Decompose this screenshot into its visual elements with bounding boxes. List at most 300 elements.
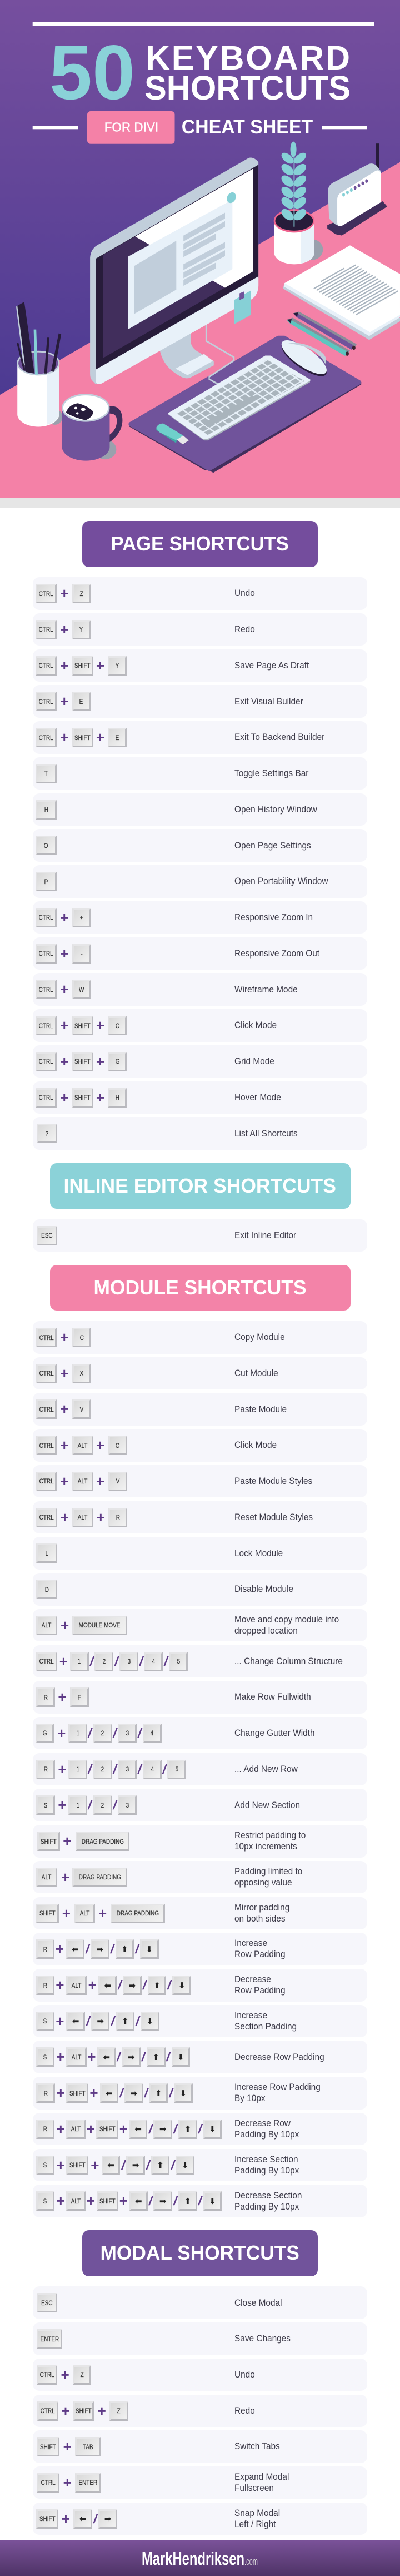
keys: shift drag padding <box>37 1832 129 1851</box>
keys: ctrl x: + <box>60 1365 68 1382</box>
keys: s shift arrows: ⬅ <box>107 2160 114 2170</box>
row: increase section padding <box>33 2005 367 2037</box>
panel: inline editor shortcuts <box>33 1163 367 1252</box>
keys: s alt arrows: / <box>117 2049 121 2064</box>
description: Exit To Backend Builder <box>234 732 324 742</box>
description: Open Page Settings <box>234 840 311 851</box>
row: close modal <box>33 2286 367 2319</box>
keys: s arrows: + <box>56 2013 64 2029</box>
keys: shift drag padding: SHIFT <box>41 1838 57 1845</box>
keys: ctrl w: CTRL <box>39 986 53 994</box>
keys: shift alt drag padding <box>33 1904 165 1923</box>
keys: s alt arrows: S <box>43 2053 47 2061</box>
footer <box>0 2540 400 2576</box>
keys: ctrl z: Z <box>79 589 83 597</box>
description: Increase Row Padding <box>234 2082 320 2092</box>
keys: r alt shift arrows: R <box>43 2125 47 2133</box>
description: Responsive Zoom In <box>234 912 313 922</box>
keys: s alt shift arrows: ALT <box>71 2197 81 2205</box>
row: undo <box>33 2359 367 2391</box>
keys: g 1 2 3 4: / <box>88 1726 92 1740</box>
description: Row Padding <box>234 1949 285 1959</box>
keys: ctrl shift z: Z <box>117 2407 121 2415</box>
row: increase section padding by 10px <box>33 2149 367 2181</box>
description <box>234 1614 339 1636</box>
row: responsive zoom out <box>33 937 367 970</box>
row: redo <box>33 2394 367 2427</box>
keys: s arrows: / <box>111 2014 114 2028</box>
keys: s alt shift arrows: / <box>198 2193 202 2208</box>
keys: ctrl shift h: H <box>116 1094 119 1101</box>
icon: monitor <box>90 158 258 384</box>
description: Save Page As Draft <box>234 660 309 671</box>
keys: s 1 2 3: + <box>58 1796 67 1813</box>
keys: r alt arrows: ALT <box>71 1982 81 1989</box>
keys: ctrl shift g: + <box>60 1053 68 1070</box>
row: toggle settings bar <box>33 757 367 790</box>
row: decrease section padding by 10px <box>33 2185 367 2217</box>
keys: shift arrows: ➡ <box>104 2514 111 2524</box>
keys: ctrl shift h: + <box>60 1089 68 1105</box>
keys: ctrl shift h <box>36 1088 127 1108</box>
description: Switch Tabs <box>234 2441 279 2451</box>
keys: ctrl 1 2 3 4 5: 4 <box>152 1657 155 1665</box>
row: redo <box>33 613 367 646</box>
keys: r arrows: ⬇ <box>146 1944 153 1954</box>
keys: r 1 2 3 4 5: / <box>88 1762 92 1776</box>
keys: esc: ESC <box>41 1232 53 1239</box>
keys: s alt shift arrows: S <box>43 2197 47 2205</box>
keys: ctrl y <box>36 620 91 639</box>
keys: ctrl enter <box>33 2473 101 2493</box>
keys: alt drag padding <box>36 1868 127 1887</box>
keys: ctrl shift c: + <box>60 1017 68 1034</box>
keys: shift arrows: + <box>62 2510 70 2527</box>
icon: coffee mug <box>62 394 122 461</box>
heading: modal shortcuts <box>82 2230 318 2276</box>
keys: ctrl alt r: + <box>61 1509 69 1526</box>
keys: r 1 2 3 4 5: R <box>43 1765 48 1773</box>
keys: d: D <box>44 1586 49 1594</box>
keys: s arrows: / <box>86 2014 90 2028</box>
description: Padding By 10px <box>234 2201 299 2212</box>
keys: ctrl shift c: SHIFT <box>74 1022 91 1030</box>
row: increase row padding by 10px <box>33 2077 367 2110</box>
keys: s alt shift arrows: ⬆ <box>184 2196 191 2206</box>
keys: ctrl shift y: Y <box>116 662 119 669</box>
keys: ctrl alt v: + <box>96 1473 104 1490</box>
description: Undo <box>234 2369 254 2380</box>
keys: r alt arrows: ⬅ <box>104 1981 111 1991</box>
keys: r alt arrows: R <box>43 1982 47 1989</box>
title KEYBOARD: KEYBOARD <box>146 39 350 77</box>
keys: ctrl alt r: R <box>116 1513 120 1521</box>
description: Padding By 10px <box>234 2129 299 2140</box>
description: Save Changes <box>234 2333 290 2344</box>
row: copy module <box>33 1321 367 1353</box>
description: Disable Module <box>234 1584 293 1594</box>
keys: r f: R <box>43 1694 48 1701</box>
keys: alt drag padding: + <box>61 1869 69 1885</box>
description: Move and copy module into <box>234 1614 339 1625</box>
keys: s alt arrows: ⬆ <box>152 2052 159 2062</box>
keys: ctrl v: V <box>80 1406 83 1413</box>
description: Open History Window <box>234 804 317 815</box>
keys: s shift arrows: + <box>57 2157 65 2173</box>
footer brand text: .com <box>244 2556 258 2567</box>
keys: r alt shift arrows: + <box>119 2121 128 2137</box>
description <box>234 1933 285 1965</box>
keys: r alt shift arrows: ⬆ <box>184 2124 191 2134</box>
badge: for divi <box>87 111 174 144</box>
keys: r arrows: / <box>135 1942 139 1956</box>
description: Decrease Row Padding <box>234 2052 324 2062</box>
row: responsive zoom in <box>33 901 367 934</box>
keys: r alt shift arrows: / <box>198 2122 202 2136</box>
row: open history window <box>33 793 367 826</box>
keys: ctrl w: + <box>60 981 68 997</box>
description: 10px increments <box>234 1841 297 1852</box>
keys: shift tab <box>33 2437 101 2456</box>
keys: r 1 2 3 4 5: 2 <box>101 1765 104 1773</box>
keys: ctrl alt v: V <box>116 1477 119 1485</box>
keys: ctrl shift e: + <box>96 729 104 746</box>
keys: ctrl 1 2 3 4 5: / <box>114 1654 118 1668</box>
keys: ctrl shift h: + <box>96 1089 104 1105</box>
keys: ctrl alt c: CTRL <box>39 1442 54 1450</box>
keys: ctrl shift g: + <box>96 1053 104 1070</box>
icon: paper stack <box>283 245 400 340</box>
keys: ctrl shift y <box>36 656 127 676</box>
description: Expand Modal <box>234 2471 289 2482</box>
row: paste module styles <box>33 1465 367 1497</box>
keys: shift drag padding: + <box>63 1833 71 1849</box>
grey divider band <box>0 498 400 508</box>
keys: alt drag padding: ALT <box>42 1873 52 1881</box>
keys: l: L <box>45 1550 48 1557</box>
description: Paste Module Styles <box>234 1476 312 1486</box>
row: snap modal left right <box>33 2503 367 2535</box>
description <box>234 2185 302 2217</box>
keys: ctrl shift e: + <box>60 729 68 746</box>
keys: r alt arrows: / <box>143 1978 146 1992</box>
keys: r alt shift arrows: + <box>87 2121 95 2137</box>
keys: ctrl v <box>36 1399 91 1419</box>
keys: ctrl z: Z <box>81 2371 84 2379</box>
keys: s arrows: ⬆ <box>122 2016 129 2026</box>
keys: r alt shift arrows: ⬇ <box>209 2124 216 2134</box>
keys: r arrows: R <box>43 1945 47 1953</box>
keys: s shift arrows: ⬇ <box>182 2160 188 2170</box>
keys: r shift arrows: ⬆ <box>155 2088 162 2098</box>
keys: r shift arrows: / <box>169 2086 173 2100</box>
keys: s shift arrows: / <box>171 2158 174 2172</box>
row: click mode <box>33 1429 367 1462</box>
description: Decrease Row <box>234 2118 290 2128</box>
keys: r shift arrows: ⬅ <box>106 2088 113 2098</box>
keys: s 1 2 3: / <box>113 1798 117 1812</box>
row: mirror padding <box>33 1897 367 1929</box>
keys: r 1 2 3 4 5: / <box>138 1762 141 1776</box>
description: Paste Module <box>234 1404 287 1414</box>
keys: r alt arrows <box>33 1976 191 1995</box>
keys: ctrl 1 2 3 4 5: 2 <box>103 1657 106 1665</box>
keys: r alt shift arrows: / <box>173 2122 177 2136</box>
keys: alt module move: ALT <box>42 1621 52 1629</box>
keys: r alt shift arrows: / <box>149 2122 152 2136</box>
keys: ctrl c: + <box>60 1329 68 1346</box>
row: hover mode <box>33 1081 367 1114</box>
hero illustration with title <box>0 0 400 498</box>
row: cut module <box>33 1357 367 1389</box>
keys: s alt shift arrows: + <box>57 2192 65 2209</box>
description <box>234 2005 297 2037</box>
keys: alt module move: + <box>61 1617 69 1634</box>
keys: ctrl 1 2 3 4 5: / <box>90 1654 93 1668</box>
description: Redo <box>234 624 254 634</box>
keys: ctrl x: X <box>80 1369 83 1377</box>
keys: ctrl alt r: + <box>97 1509 105 1526</box>
description: Left / Right <box>234 2519 276 2529</box>
description <box>234 2503 280 2535</box>
keys: ctrl shift y: SHIFT <box>74 662 91 669</box>
keys: ctrl shift c: C <box>116 1022 119 1030</box>
keys: ctrl alt v <box>36 1472 127 1491</box>
row: exit inline editor <box>33 1219 367 1252</box>
icon: plant <box>274 142 323 264</box>
title rule top <box>33 22 374 26</box>
heading: inline editor shortcuts: INLINE EDITOR SHORTCUTS <box>64 1174 336 1197</box>
keys: ctrl plus: + <box>80 914 83 921</box>
row: expand modal fullscreen <box>33 2466 367 2499</box>
keys: r shift arrows: + <box>57 2084 65 2101</box>
keys: ctrl enter: ENTER <box>78 2479 97 2486</box>
keys: h: H <box>44 806 48 813</box>
keys: s alt shift arrows: + <box>119 2192 128 2209</box>
description: Increase <box>234 2010 267 2021</box>
keys: ctrl 1 2 3 4 5: 1 <box>78 1657 81 1665</box>
keys: s shift arrows: SHIFT <box>69 2161 86 2169</box>
keys: s 1 2 3: S <box>44 1801 47 1809</box>
description: Click Mode <box>234 1020 277 1030</box>
description: Responsive Zoom Out <box>234 948 319 959</box>
keys: r shift arrows: ⬇ <box>180 2088 187 2098</box>
keys: s alt arrows: ALT <box>72 2053 81 2061</box>
keys: g 1 2 3 4: 4 <box>151 1729 153 1737</box>
row: switch tabs <box>33 2430 367 2463</box>
keys: s shift arrows: / <box>122 2158 125 2172</box>
keys: s alt shift arrows: / <box>149 2193 152 2208</box>
keys: g 1 2 3 4: 3 <box>126 1729 129 1737</box>
title number 50: 50 <box>49 29 135 116</box>
icon: router <box>327 143 387 236</box>
keys: ctrl alt c: C <box>116 1442 119 1450</box>
panel: module shortcuts <box>33 1265 367 2217</box>
keys: r 1 2 3 4 5: 4 <box>151 1765 154 1773</box>
keys: s shift arrows: ⬆ <box>157 2160 164 2170</box>
description: Padding By 10px <box>234 2165 299 2176</box>
keys: ctrl x <box>36 1364 91 1383</box>
footer brand text: MarkHendriksen <box>142 2548 244 2569</box>
description: Exit Visual Builder <box>234 696 303 706</box>
keys: t: T <box>44 770 48 777</box>
keys: ctrl alt c: + <box>96 1437 104 1453</box>
keys: ctrl 1 2 3 4 5: / <box>164 1654 168 1668</box>
keys: r f <box>36 1687 89 1707</box>
keys: s 1 2 3: 1 <box>76 1801 79 1809</box>
keys: r 1 2 3 4 5 <box>36 1760 186 1779</box>
description: Reset Module Styles <box>234 1512 313 1522</box>
row: restrict padding <box>33 1825 367 1858</box>
left rule <box>33 126 78 129</box>
keys: s 1 2 3 <box>36 1795 137 1815</box>
keys: ctrl c: CTRL <box>39 1333 54 1341</box>
keys: s alt arrows: / <box>142 2049 145 2064</box>
keys: ctrl c: C <box>79 1333 83 1341</box>
keys: ctrl alt r: ALT <box>78 1513 88 1521</box>
keys: ctrl shift c: + <box>96 1017 104 1034</box>
desk illustration <box>16 142 400 473</box>
keys: shift tab: TAB <box>83 2443 93 2451</box>
keys: ctrl w <box>36 980 91 999</box>
keys: ctrl shift c <box>36 1016 127 1035</box>
keys: s alt shift arrows <box>33 2191 222 2211</box>
keys: r alt arrows: ⬇ <box>178 1981 185 1991</box>
keys: ctrl 1 2 3 4 5: CTRL <box>39 1657 54 1665</box>
keys: ctrl minus <box>36 944 91 964</box>
keys: shift drag padding: DRAG PADDING <box>81 1838 124 1845</box>
heading: module shortcuts <box>50 1264 350 1311</box>
keys: ctrl plus <box>36 908 91 927</box>
subtitle: cheat sheet: CHEAT SHEET <box>182 116 313 138</box>
icon: keyboard <box>168 356 310 440</box>
keys: ctrl alt v: CTRL <box>39 1477 54 1485</box>
keys: ctrl y: Y <box>79 626 83 633</box>
keys: r alt shift arrows <box>33 2120 222 2139</box>
row: change column structure <box>33 1645 367 1677</box>
description: Snap Modal <box>234 2508 280 2518</box>
description: Increase <box>234 1938 267 1948</box>
keys: s alt arrows: ➡ <box>128 2052 135 2062</box>
keys: shift arrows: SHIFT <box>39 2515 55 2523</box>
keys: ctrl z: + <box>61 2366 69 2383</box>
description: dropped location <box>234 1625 297 1636</box>
row: reset module styles <box>33 1501 367 1533</box>
heading: page shortcuts <box>82 521 318 567</box>
keys: s alt arrows: ⬇ <box>177 2052 184 2062</box>
keys: ctrl alt c <box>36 1436 127 1455</box>
icon: usb stick <box>156 424 189 444</box>
keys: s arrows: ➡ <box>97 2016 104 2026</box>
description: Redo <box>234 2405 254 2416</box>
keys: r arrows: ⬅ <box>72 1944 79 1954</box>
keys: shift arrows <box>33 2509 117 2529</box>
keys: shift tab: + <box>63 2438 72 2455</box>
description <box>234 2149 299 2181</box>
keys: ctrl 1 2 3 4 5: 5 <box>177 1657 180 1665</box>
icon: desk pad <box>129 337 361 473</box>
keys: ctrl 1 2 3 4 5: / <box>139 1654 143 1668</box>
keys: ctrl shift c: CTRL <box>39 1022 53 1030</box>
keys: alt module move: MODULE MOVE <box>79 1621 121 1629</box>
panel: modal shortcuts <box>0 2230 400 2535</box>
keys: ctrl minus: CTRL <box>39 950 53 957</box>
row: click mode <box>33 1009 367 1042</box>
keys: r alt shift arrows: + <box>57 2121 65 2137</box>
badge: for divi: FOR DIVI <box>104 120 158 135</box>
keys: s 1 2 3: 2 <box>101 1801 104 1809</box>
keys: s arrows: S <box>43 2017 47 2025</box>
heading: module shortcuts: MODULE SHORTCUTS <box>94 1276 306 1299</box>
keys: ctrl minus: - <box>81 950 82 957</box>
keys: s alt shift arrows: / <box>173 2193 177 2208</box>
keys: g 1 2 3 4: 2 <box>101 1729 104 1737</box>
keys: ctrl shift g: G <box>115 1058 119 1065</box>
row: add new section <box>33 1789 367 1821</box>
keys: ctrl e: CTRL <box>39 698 53 706</box>
keys: r shift arrows: R <box>43 2089 48 2097</box>
description: Open Portability Window <box>234 876 328 886</box>
keys: r alt arrows: ⬆ <box>153 1981 161 1991</box>
keys: r 1 2 3 4 5: 1 <box>76 1765 79 1773</box>
keys: ctrl alt r <box>36 1508 127 1527</box>
row: disable module <box>33 1573 367 1606</box>
description: Mirror padding <box>234 1902 289 1913</box>
panel: page shortcuts <box>33 521 367 1150</box>
keys: s shift arrows: + <box>91 2157 99 2173</box>
keys: alt drag padding: DRAG PADDING <box>78 1873 121 1881</box>
keys: r 1 2 3 4 5: 5 <box>175 1765 178 1773</box>
keys: ctrl shift z <box>33 2401 128 2421</box>
keys: ctrl z: CTRL <box>39 589 53 597</box>
keys: question mark: ? <box>46 1130 48 1138</box>
keys: r alt arrows: + <box>56 1977 64 1993</box>
keys: s shift arrows: S <box>43 2161 47 2169</box>
keys: r 1 2 3 4 5: + <box>58 1761 67 1778</box>
row: decrease row padding by 10px <box>33 2113 367 2145</box>
keys: p: P <box>44 877 48 885</box>
row: open page settings <box>33 829 367 862</box>
keys: g 1 2 3 4: + <box>57 1725 66 1741</box>
description: Restrict padding to <box>234 1830 306 1840</box>
keys: shift alt drag padding: + <box>62 1905 71 1922</box>
description: Exit Inline Editor <box>234 1230 296 1240</box>
row: save changes <box>33 2322 367 2355</box>
keys: s 1 2 3: 3 <box>126 1801 129 1809</box>
description <box>234 2077 320 2110</box>
description: Undo <box>234 588 254 598</box>
keys: ctrl e: E <box>79 698 83 706</box>
description: Click Mode <box>234 1440 277 1450</box>
keys: ctrl shift e: E <box>116 734 119 742</box>
keys: s alt arrows <box>33 2047 191 2067</box>
row: decrease row padding single line <box>33 2041 367 2073</box>
row: paste module <box>33 1393 367 1426</box>
keys: s arrows: ⬅ <box>72 2016 79 2026</box>
keys: ctrl z <box>33 2365 92 2385</box>
keys: alt module move <box>36 1616 127 1635</box>
keys: r f: + <box>58 1689 67 1705</box>
keys: r alt shift arrows: ⬅ <box>134 2124 142 2134</box>
keys: s arrows: / <box>136 2014 139 2028</box>
description: Cut Module <box>234 1368 278 1378</box>
description <box>234 2113 299 2145</box>
keys: ctrl shift g: SHIFT <box>74 1058 91 1065</box>
description: Lock Module <box>234 1548 283 1558</box>
heading: page shortcuts: PAGE SHORTCUTS <box>111 532 289 555</box>
row: exit visual builder <box>33 685 367 718</box>
description: Increase Section <box>234 2154 298 2165</box>
